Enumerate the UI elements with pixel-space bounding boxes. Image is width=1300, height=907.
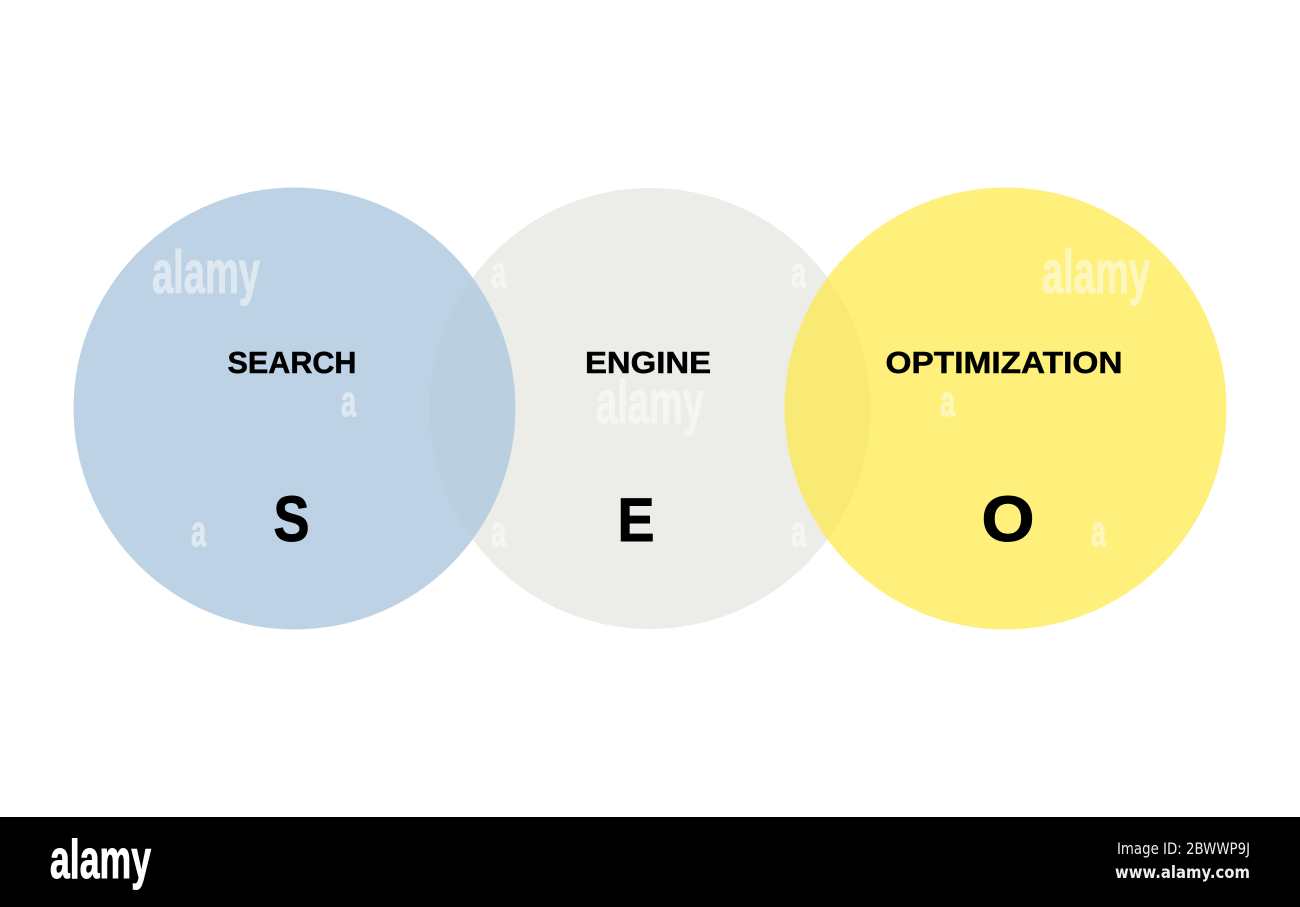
circle: optimization: [784, 188, 1226, 630]
letter: O: O: [982, 483, 1034, 555]
watermarks: a: [940, 377, 955, 426]
footer url: www.alamy.com: [1115, 863, 1250, 883]
circle: engine: [430, 188, 870, 629]
label: engine: ENGINE: [585, 345, 711, 380]
watermarks: alamy: [1042, 239, 1150, 306]
watermarks: a: [491, 507, 506, 556]
image id: Image ID: 2BWWP9J: [1117, 839, 1250, 858]
letter: S: S: [274, 483, 310, 555]
watermarks: alamy: [596, 369, 704, 436]
label: search: SEARCH: [228, 345, 356, 380]
label: optimization: OPTIMIZATION: [886, 345, 1122, 380]
watermarks: a: [191, 507, 206, 556]
watermarks: a: [791, 248, 806, 297]
footer logo: alamy: [50, 828, 151, 890]
watermarks: a: [491, 248, 506, 297]
letter: E: E: [618, 486, 654, 554]
watermarks: a: [1091, 507, 1106, 556]
watermarks: alamy: [152, 239, 260, 306]
watermarks: [152, 239, 1150, 556]
circle: search: [74, 188, 516, 630]
watermarks: a: [791, 507, 806, 556]
watermarks: a: [341, 377, 356, 426]
footer bar: [0, 817, 1300, 907]
